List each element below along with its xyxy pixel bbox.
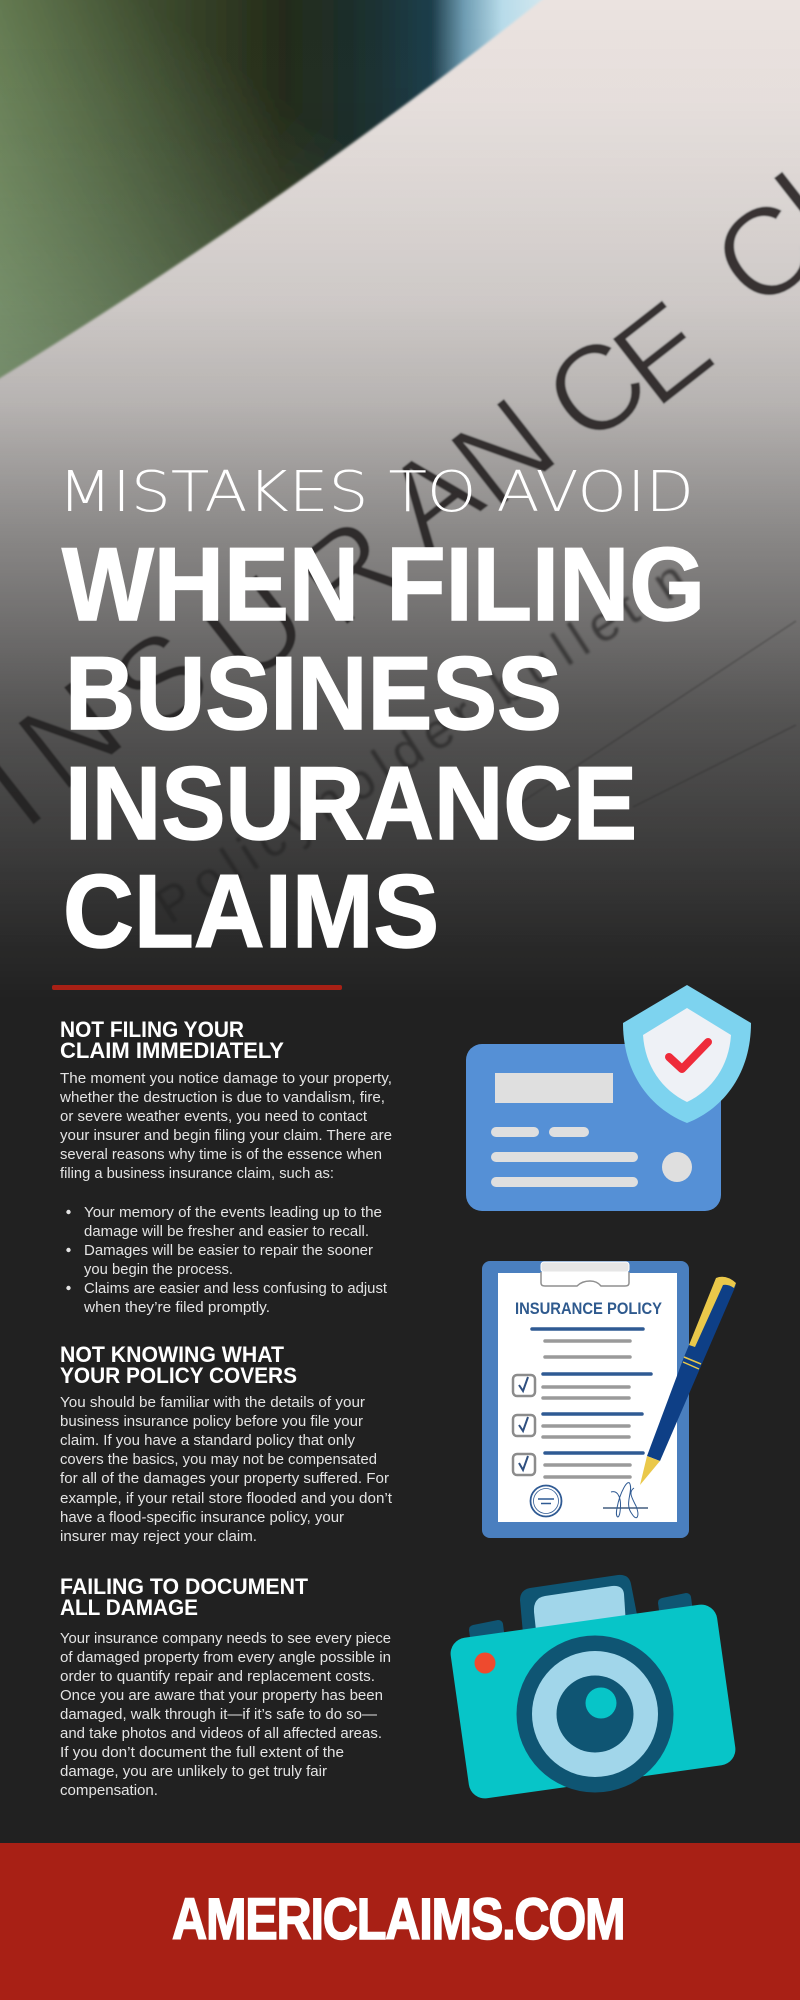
section 2 paragraph: example, if your retail store flooded and you don’t	[60, 1490, 393, 1507]
section 3 paragraph: and take photos and videos of all affected areas.	[60, 1725, 382, 1742]
check mark	[669, 1042, 708, 1069]
section 3: failing to document all damage	[60, 1574, 391, 1799]
title line: mistakes to avoid: MISTAKES TO AVOID	[58, 460, 694, 525]
section 3 paragraph: damage, you are unlikely to get truly fair	[60, 1763, 327, 1780]
printed word on the paper	[0, 121, 800, 853]
policy title: INSURANCE POLICY	[515, 1299, 663, 1318]
section 2 paragraph: You should be familiar with the details of your	[60, 1394, 365, 1411]
section 1 bullet list: Your memory of the events leading up to the	[84, 1204, 382, 1221]
viewfinder housing	[520, 1575, 639, 1645]
icon: camera	[449, 1575, 737, 1800]
section 1 bullet list: Claims are easier and less confusing to adjust	[84, 1280, 388, 1297]
clip	[541, 1262, 629, 1286]
paper sheet	[498, 1273, 677, 1522]
checkboxes	[513, 1375, 535, 1475]
section 2 paragraph: covers the basics, you may not be compensated	[60, 1451, 377, 1468]
printed word on the paper: U	[178, 547, 332, 709]
card details	[491, 1073, 692, 1187]
section 1 heading	[60, 1017, 284, 1063]
section 1 bullet list: damage will be fresher and easier to recall.	[84, 1223, 369, 1240]
section 1 heading: CLAIM IMMEDIATELY	[60, 1038, 284, 1063]
section 1 bullet list	[66, 1204, 388, 1316]
hero photo: insurance claim paper	[0, 0, 800, 1000]
section 1 paragraph: your insurer and begin filing your claim. There are	[60, 1127, 392, 1144]
shield	[623, 985, 751, 1123]
section 2 paragraph	[60, 1394, 393, 1545]
printed word on the paper: C	[519, 308, 673, 470]
section 2 heading	[60, 1342, 297, 1388]
section 2 paragraph: claim. If you have a standard policy that only	[60, 1432, 355, 1449]
section 2: not knowing what your policy covers	[60, 1342, 393, 1545]
section 2 heading: YOUR POLICY COVERS	[60, 1363, 297, 1388]
section 3 paragraph: If you don’t document the full extent of the	[60, 1744, 344, 1761]
title main lines: INSURANCE	[65, 746, 637, 862]
section 1 bullet list: when they’re filed promptly.	[83, 1299, 270, 1316]
printed word on the paper: S	[86, 601, 234, 759]
printed word on the paper: E	[588, 274, 736, 432]
small printed line on the paper: Policyholder bulletin	[145, 550, 696, 934]
viewfinder window	[534, 1586, 626, 1640]
title main lines: CLAIMS	[63, 854, 439, 970]
title main lines: WHEN FILING	[62, 527, 705, 643]
footer banner	[0, 1843, 800, 2000]
section 2 paragraph: business insurance policy before you file your	[60, 1413, 363, 1430]
section 1: not filing your claim immediately	[59, 1017, 392, 1316]
icon: insurance card with shield	[466, 985, 751, 1211]
red divider rule	[52, 985, 342, 990]
camera body	[449, 1603, 737, 1800]
section 2 heading: NOT KNOWING WHAT	[60, 1342, 285, 1367]
section 1 paragraph: several reasons why time is of the essence when	[60, 1146, 382, 1163]
section 3 paragraph: damaged, walk through it—if it’s safe to do so—	[60, 1706, 377, 1723]
section 1 paragraph: or severe weather events, you need to contact	[60, 1108, 368, 1125]
pen	[640, 1277, 736, 1485]
section 1 paragraph: filing a business insurance claim, such as:	[60, 1165, 334, 1182]
section 3 heading	[60, 1574, 309, 1620]
section 3 paragraph: Your insurance company needs to see every piece	[60, 1630, 391, 1647]
icon: insurance policy clipboard and pen	[482, 1261, 736, 1538]
section 1 paragraph: The moment you notice damage to your property,	[60, 1070, 392, 1087]
section 1 bullet list: you begin the process.	[84, 1261, 233, 1278]
policy lines	[532, 1329, 651, 1477]
title main lines: BUSINESS	[65, 636, 562, 752]
section 2 paragraph: for all of the damages your property suffered. For	[60, 1470, 389, 1487]
section 1 bullet list: Damages will be easier to repair the sooner	[84, 1242, 373, 1259]
section 3 paragraph	[60, 1630, 391, 1799]
section 3 paragraph: of damaged property from every angle possible in	[60, 1649, 391, 1666]
dark fade overlay	[0, 0, 800, 1000]
section 3 paragraph: compensation.	[60, 1782, 158, 1799]
title	[58, 460, 705, 970]
section 2 paragraph: have a flood-specific insurance policy, your	[60, 1509, 344, 1526]
flash light	[474, 1652, 496, 1674]
stamp	[530, 1486, 562, 1516]
website address: AMERICLAIMS.COM	[172, 1888, 626, 1952]
section 3 heading: ALL DAMAGE	[60, 1595, 198, 1620]
section 1 heading: NOT FILING YOUR	[60, 1017, 244, 1042]
printed word on the paper: A	[358, 418, 506, 576]
card body	[466, 1044, 721, 1211]
section 3 heading: FAILING TO DOCUMENT	[60, 1574, 309, 1599]
clipboard board	[482, 1261, 689, 1538]
section 1 paragraph: whether the destruction is due to vandalism, fire,	[59, 1089, 385, 1106]
printed word on the paper: R	[271, 490, 425, 652]
title main lines	[62, 527, 705, 970]
section 3 paragraph: Once you are aware that your property has been	[60, 1687, 383, 1704]
blurred green background wedge	[0, 0, 548, 381]
signature	[603, 1483, 648, 1518]
section 3 paragraph: order to quantify repair and replacement costs.	[60, 1668, 375, 1685]
lens	[516, 1636, 674, 1792]
camera buttons	[469, 1593, 693, 1645]
printed word on the paper: N	[426, 371, 580, 533]
section 2 paragraph: insurer may reject your claim.	[60, 1528, 257, 1545]
section 1 paragraph	[59, 1070, 392, 1182]
